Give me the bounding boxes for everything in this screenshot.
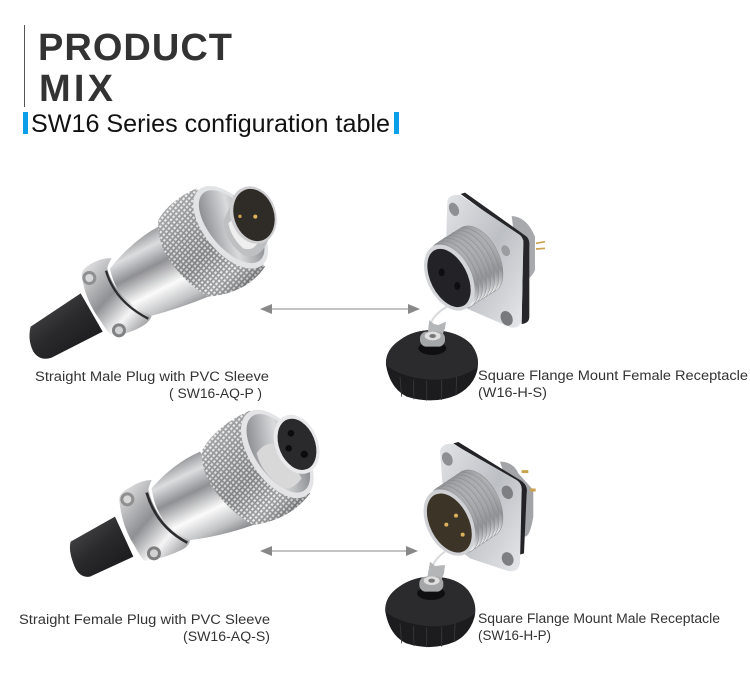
arrow: top double-headed xyxy=(260,304,420,314)
caption: female receptacle xyxy=(478,368,748,400)
arrow: bottom double-headed xyxy=(260,546,418,556)
caption: male receptacle: (SW16-H-P) xyxy=(478,628,551,643)
caption: straight female plug: Straight Female Plug with PVC Sleeve xyxy=(19,612,270,627)
product: square flange female receptacle with cap xyxy=(386,193,545,401)
caption: straight male plug xyxy=(35,369,269,401)
product: straight male plug xyxy=(29,173,284,359)
title block: MIX xyxy=(39,68,114,110)
title block: PRODUCT xyxy=(38,27,232,69)
caption: straight female plug: (SW16-AQ-S) xyxy=(183,629,270,644)
title block xyxy=(24,25,232,110)
caption: male receptacle: Square Flange Mount Male Receptacle xyxy=(478,611,720,626)
caption: straight male plug: ( SW16-AQ-P ) xyxy=(169,386,262,401)
caption: female receptacle: (W16-H-S) xyxy=(478,385,547,400)
caption: straight female plug xyxy=(19,612,270,644)
product: square flange male receptacle with cap xyxy=(385,442,536,647)
caption: male receptacle xyxy=(478,611,720,643)
caption: straight male plug: Straight Male Plug with PVC Sleeve xyxy=(35,369,269,384)
caption: female receptacle: Square Flange Mount Female Receptacle xyxy=(478,368,748,383)
subtitle with blue bars: SW16 Series configuration table xyxy=(31,110,390,138)
product: straight female plug xyxy=(70,397,328,577)
